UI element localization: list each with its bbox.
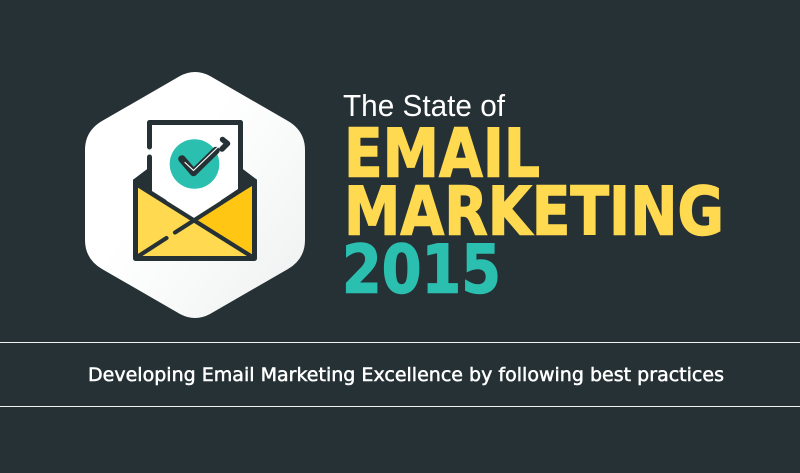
icon: check mark [182, 140, 228, 172]
letter paper [150, 122, 240, 218]
hexagon badge [85, 72, 305, 318]
envelope outlines [136, 181, 254, 258]
title line: MARKETING: MARKETING [344, 172, 724, 250]
teal check circle [170, 139, 219, 189]
icon: open envelope with letter [134, 122, 256, 258]
icon badge: white hexagon with envelope [85, 72, 305, 318]
title line: The State of: The State of [343, 88, 505, 123]
subtitle text: Developing Email Marketing Excellence by following best practices [88, 364, 724, 386]
title line: EMAIL: EMAIL [344, 114, 540, 192]
title line: 2015: 2015 [342, 230, 501, 308]
envelope right panel [194, 186, 252, 257]
envelope left and bottom panels [138, 187, 252, 257]
envelope back flap corners [134, 169, 256, 200]
title block [342, 88, 724, 308]
